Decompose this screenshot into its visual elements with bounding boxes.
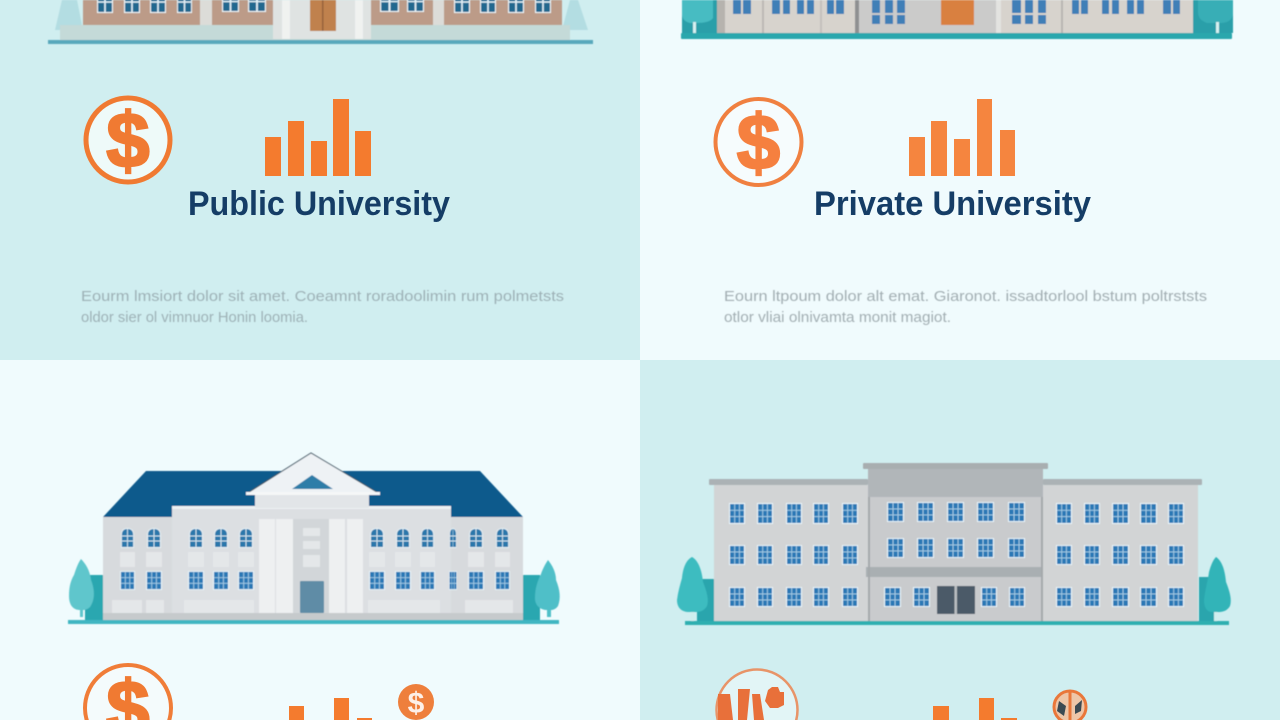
heading: private university: Private University	[814, 185, 1091, 223]
building: public university with blue roof and portico	[68, 453, 560, 624]
bar chart	[265, 99, 371, 176]
icon: dollar coin: $	[737, 98, 780, 186]
text block: description	[724, 288, 1207, 326]
building: public university brick facade	[48, 0, 593, 44]
tree: right	[523, 560, 560, 620]
tree: right	[1199, 557, 1231, 622]
icon: dollar coin, cropped at bottom	[85, 664, 171, 720]
panel: private university, top right	[640, 0, 1280, 360]
heading: public university: Public University	[188, 185, 450, 223]
text block: description: otlor vliai olnivamta monit magiot.	[724, 309, 951, 326]
text block: description: Eourn ltpoum dolor alt emat. Giaronot. issadtorlool bstum poltrststs	[724, 288, 1207, 305]
windows	[120, 528, 510, 590]
icon: dollar coin	[86, 96, 170, 184]
text block: description	[81, 288, 564, 326]
icon: small orange coin	[398, 684, 434, 720]
text block: description: oldor sier ol vimnuor Honin loomia.	[81, 309, 308, 326]
tree: left	[69, 559, 103, 620]
door	[937, 586, 975, 614]
door	[300, 581, 324, 613]
icon: small garbled coin	[1054, 691, 1086, 720]
tree: left	[677, 557, 714, 622]
building: private university grey facade	[681, 0, 1233, 39]
panel: private university, bottom right	[640, 360, 1280, 720]
panel: public university, bottom left	[0, 360, 640, 720]
building: private university three-storey block	[677, 463, 1231, 625]
centre windows	[884, 502, 1025, 607]
icon: garbled orange coin, cropped at bottom	[716, 670, 798, 720]
columns	[259, 519, 363, 613]
bar chart, cropped at bottom	[289, 698, 372, 720]
text block: description: Eourm lmsiort dolor sit amet. Coeamnt roradoolimin rum polmetsts	[81, 288, 564, 305]
right wing windows	[1056, 503, 1184, 607]
icon: dollar coin: $	[106, 96, 150, 184]
icon: small orange coin: $	[408, 687, 425, 720]
bar chart, cropped at bottom	[933, 698, 1017, 720]
faint windows	[112, 528, 513, 614]
left wing windows	[729, 503, 858, 607]
bar chart	[909, 99, 1015, 176]
icon: dollar coin	[716, 98, 802, 186]
panel: public university, top left	[0, 0, 640, 360]
